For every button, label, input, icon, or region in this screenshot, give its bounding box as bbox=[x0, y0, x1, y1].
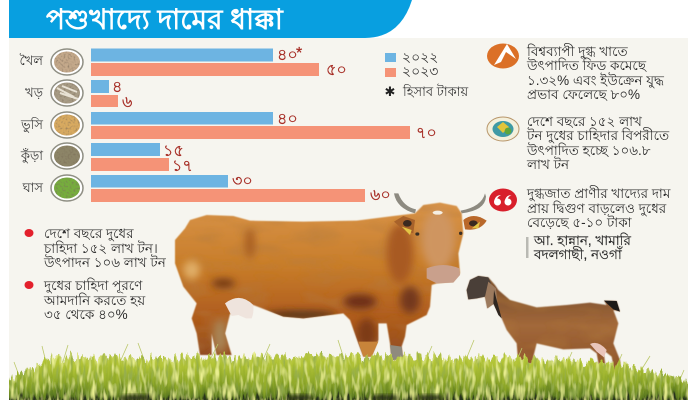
row: khoil: * bbox=[296, 45, 302, 62]
quote from farmer bbox=[489, 185, 671, 262]
row: bhushi: ভুসি bbox=[20, 117, 43, 133]
row: khor: খড় bbox=[25, 85, 44, 100]
row: ghas bbox=[22, 173, 391, 204]
row: kura: ১৭ bbox=[172, 158, 193, 175]
row: ghas: ৩০ bbox=[232, 173, 253, 190]
bullet: demand vs production: উৎপাদন ১০৬ লাখ টন bbox=[43, 254, 167, 270]
bullet: imports: আমদানি করতে হয় bbox=[43, 292, 146, 308]
row: bhushi: ৪০ bbox=[277, 111, 298, 128]
row: khoil: ৫০ bbox=[326, 62, 347, 79]
stat: national demand: দেশে বছরে ১৫২ লাখ bbox=[527, 114, 643, 129]
bullet notes bbox=[24, 226, 167, 322]
illustration: goat bbox=[467, 276, 622, 375]
stat: global milk: ১.৩২% এবং ইউক্রেন যুদ্ধ bbox=[527, 72, 665, 88]
illustration: cow bbox=[175, 193, 487, 360]
legend: ✱ bbox=[385, 84, 396, 99]
bullet: imports: দুধের চাহিদা পূরণে bbox=[43, 277, 143, 294]
title banner bbox=[9, 0, 412, 38]
legend bbox=[385, 49, 468, 99]
quote from farmer: আ. হান্নান, খামারি bbox=[533, 232, 631, 248]
grass bbox=[0, 340, 700, 400]
row: kura bbox=[20, 143, 193, 175]
quote from farmer: বদলগাছী, নওগাঁ bbox=[533, 246, 623, 262]
row: khor bbox=[25, 79, 132, 111]
stat: global milk bbox=[487, 43, 665, 102]
stat: national demand: টন দুধের চাহিদার বিপরীতে bbox=[526, 127, 670, 144]
stat: national demand: লাখ টন bbox=[526, 156, 570, 172]
row: bhushi: ৭০ bbox=[416, 125, 437, 142]
row: khoil: ৪০ bbox=[277, 47, 298, 64]
legend: ২০২৩ bbox=[402, 63, 438, 79]
stat: global milk: প্রভাব ফেলেছে ৮০% bbox=[527, 87, 640, 102]
row: ghas: ঘাস bbox=[22, 180, 43, 195]
row: khoil bbox=[20, 45, 347, 79]
stat: national demand bbox=[487, 114, 670, 172]
legend: হিসাব টাকায় bbox=[402, 84, 468, 99]
stat: global milk: বিশ্বব্যাপী দুগ্ধ খাতে bbox=[526, 43, 629, 60]
stat: national demand: উৎপাদিত হচ্ছে ১০৬.৮ bbox=[526, 142, 651, 158]
bullet: demand vs production: দেশে বছরে দুধের bbox=[44, 226, 134, 242]
row: khor: ৬ bbox=[122, 94, 132, 111]
row: bhushi bbox=[20, 111, 437, 142]
bullet: imports: ৩৫ থেকে ৪০% bbox=[44, 307, 128, 322]
bar chart: feed prices bbox=[20, 45, 437, 204]
title banner: পশুখাদ্যে দামের ধাক্কা bbox=[46, 4, 284, 35]
row: ghas: ৬০ bbox=[370, 187, 391, 204]
bullet: demand vs production: চাহিদা ১৫২ লাখ টন। bbox=[43, 240, 158, 256]
bullet: demand vs production bbox=[24, 226, 167, 270]
quote from farmer: প্রায় দ্বিগুণ বাড়লেও দুধের bbox=[527, 200, 667, 217]
bullet: imports bbox=[24, 277, 146, 322]
icon: quotation mark bbox=[489, 188, 517, 212]
row: kura: কুঁড়া bbox=[20, 148, 43, 164]
legend: ২০২২ bbox=[402, 49, 438, 65]
row: khor: ৪ bbox=[112, 79, 122, 96]
row: khoil: খৈল bbox=[20, 53, 43, 68]
quote from farmer: বেড়েছে ৫-১০ টাকা bbox=[527, 214, 633, 230]
icon: orange logo bbox=[487, 44, 519, 68]
stat: global milk: উৎপাদিত ফিড কমেছে bbox=[526, 57, 648, 73]
icon: round emblem bbox=[487, 117, 519, 141]
quote from farmer: দুগ্ধজাত প্রাণীর খাদ্যের দাম bbox=[526, 185, 671, 202]
row: kura: ১৫ bbox=[163, 143, 184, 160]
